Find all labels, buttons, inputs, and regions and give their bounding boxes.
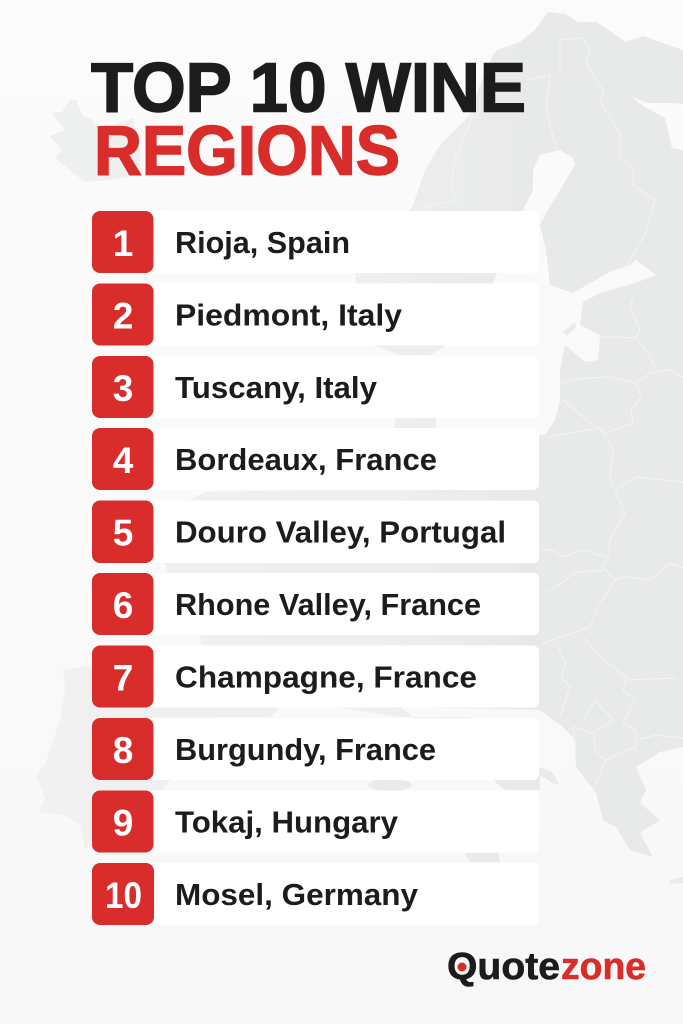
map: southern islands [368,322,683,884]
row 10: 10 [105,875,142,916]
row 10 [92,863,539,925]
row 7: Champagne, France [175,660,477,694]
row 9 [92,790,539,852]
row 6 [92,573,539,635]
row 5: 5 [113,512,133,554]
row 7 [92,646,539,708]
logo: Quotezone [447,946,646,988]
row 9: 9 [113,802,133,844]
row 2 [92,284,539,346]
row 1 [92,211,539,273]
row 3 [92,356,539,418]
row 8 [92,718,539,780]
row 4: 4 [113,440,134,481]
map: Iceland [50,100,140,182]
row 3: 3 [113,368,133,409]
row 7: 7 [113,658,133,698]
row 10: Mosel, Germany [175,877,419,912]
row 9: Tokaj, Hungary [175,804,399,840]
logo: Quotezone: Quote [447,946,560,988]
row 5: Douro Valley, Portugal [175,514,506,550]
row 6: Rhone Valley, France [175,587,481,622]
row 2: Piedmont, Italy [175,298,403,332]
row 4 [92,428,539,490]
logo: Quotezone: zone [561,946,646,988]
row 2: 2 [113,296,133,336]
row 1: 1 [113,223,133,264]
title [91,48,526,190]
map: Scandinavia and continental Europe [36,12,683,857]
row 8: Burgundy, France [175,732,436,767]
row 1: Rioja, Spain [175,225,350,260]
row 3: Tuscany, Italy [175,370,378,405]
row 6: 6 [113,585,133,626]
ranked list [92,211,539,925]
row 5 [92,500,539,563]
title line 2: REGIONS [94,112,400,190]
row 4: Bordeaux, France [175,442,437,477]
title line 1: TOP 10 WINE [91,48,526,126]
map: country borders [423,38,683,790]
row 8: 8 [113,730,133,771]
